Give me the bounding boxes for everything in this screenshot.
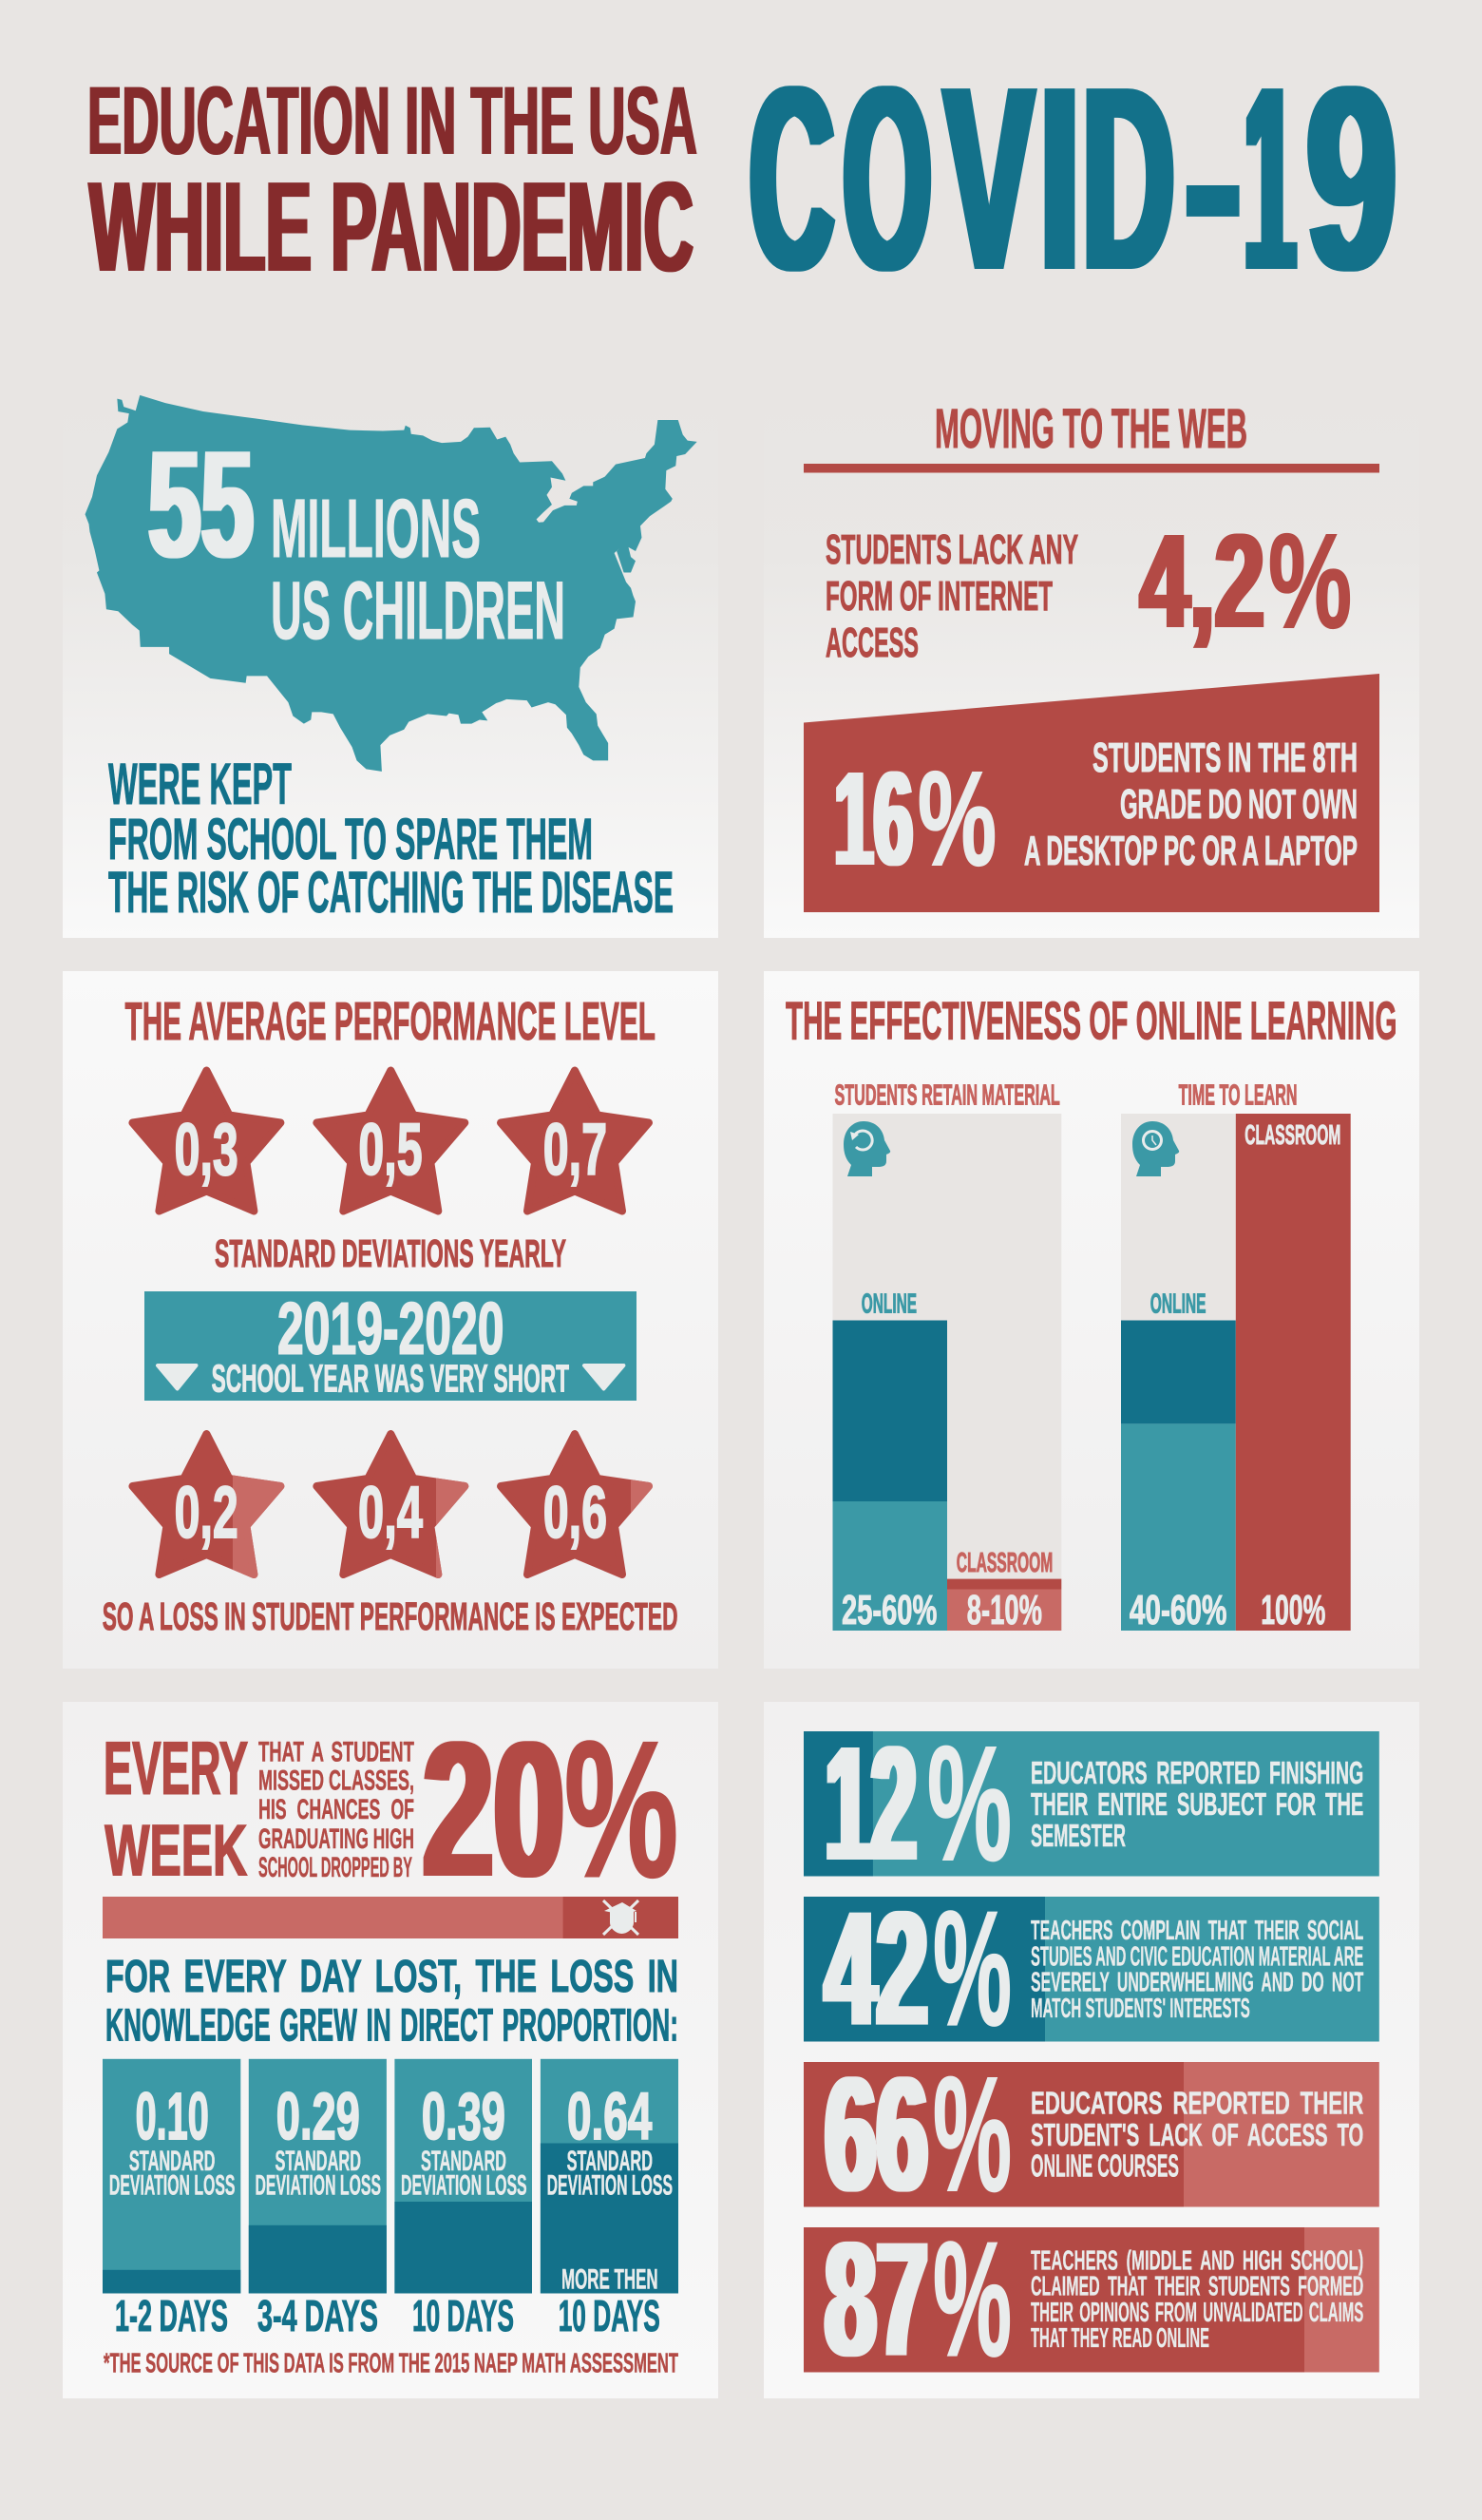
- panel: educator statistics: [764, 1702, 1419, 2398]
- subheading line 2: KNOWLEDGE GREW IN DIRECT PROPORTION:: [105, 2000, 678, 2051]
- label: US children: US CHILDREN: [271, 565, 565, 657]
- title: COVID-19: O: [844, 32, 931, 325]
- stat bar: 42%: %: [933, 1879, 1012, 2060]
- chart: students retain material: CLASSROOM: [957, 1548, 1053, 1578]
- column: 0.39, 10 days: 10 DAYS: [412, 2291, 514, 2340]
- stat bar: 12%: 12: [826, 1713, 917, 1895]
- star: 0,4: [316, 1434, 465, 1575]
- stat bar: 12%: SEMESTER: [1031, 1819, 1126, 1854]
- panel: effectiveness of online learning: [764, 971, 1419, 1669]
- column: 0.39, 10 days: STANDARD: [421, 2146, 506, 2177]
- column: 0.10, 1-2 days: [103, 2059, 240, 2340]
- title: COVID-19: 9: [1306, 32, 1396, 325]
- panel background: [764, 971, 1419, 1669]
- panel: moving to the web: [764, 394, 1419, 938]
- column: 0.39, 10 days: DEVIATION LOSS: [401, 2169, 527, 2201]
- star: 0,4: 0,4: [358, 1472, 423, 1554]
- heading rule: [804, 464, 1379, 473]
- stat bar: 42%: 42: [825, 1879, 928, 2060]
- icon: graduation cap with crossed lines: [603, 1900, 638, 1935]
- chart: students retain material: 8-10%: [967, 1588, 1042, 1633]
- panel: every week missed: [63, 1702, 718, 2398]
- stat bar: 66%: ONLINE COURSES: [1031, 2148, 1179, 2184]
- column: 0.39, 10 days: [394, 2059, 532, 2340]
- label: millions: MILLIONS: [271, 483, 481, 575]
- star: 0,2: 0,2: [175, 1472, 238, 1554]
- chart: students retain material: [832, 1079, 1061, 1633]
- star: 0,2: [132, 1434, 280, 1575]
- caption line 2: FROM SCHOOL TO SPARE THEM: [108, 807, 593, 871]
- panel: 55 million US children: [63, 394, 718, 938]
- panel background: [63, 971, 718, 1669]
- title line: education in the USA: EDUCATION IN THE USA: [87, 67, 697, 175]
- star: 0,3: 0,3: [175, 1109, 238, 1191]
- star: 0,6: [501, 1434, 649, 1575]
- banner: 2019-2020 school year: 2019-2020: [277, 1288, 504, 1369]
- column: 0.64, more then 10 days: [541, 2059, 678, 2340]
- title: COVID-19: V: [944, 32, 1035, 325]
- star: 0,6: 0,6: [543, 1472, 607, 1554]
- stat bar: 87%: %: [933, 2209, 1012, 2391]
- label: loss in student performance: SO A LOSS IN STUDENT PERFORMANCE IS EXPECTED: [103, 1594, 677, 1638]
- column: 0.64, more then 10 days: 10 DAYS: [559, 2291, 660, 2340]
- text: missed classes: HIS CHANCES OF: [258, 1794, 414, 1825]
- star: 0,5: 0,5: [358, 1109, 423, 1191]
- text: students lack internet: ACCESS: [826, 620, 919, 666]
- stat bar: 87%: 87: [825, 2209, 928, 2391]
- chart: students retain material: 25-60%: [842, 1588, 937, 1633]
- title: COVID-19: -: [1185, 32, 1242, 325]
- title: COVID-19: C: [750, 32, 834, 325]
- column: 0.10, 1-2 days: 0.10: [136, 2079, 209, 2153]
- column: 0.10, 1-2 days: 1-2 DAYS: [115, 2291, 228, 2340]
- stat: 16%: %: [918, 743, 997, 893]
- stat bar: 12%: [804, 1713, 1379, 1895]
- title: COVID-19: I: [1039, 32, 1079, 325]
- star: 0,3: [132, 1070, 280, 1211]
- column: 0.29, 3-4 days: STANDARD: [276, 2146, 361, 2177]
- chart: students retain material: ONLINE: [862, 1289, 917, 1319]
- red wedge: [804, 674, 1379, 912]
- stat: 16%: 16: [834, 743, 913, 893]
- panel background: [764, 1702, 1419, 2398]
- heading: THE AVERAGE PERFORMANCE LEVEL: [125, 992, 656, 1052]
- column: 0.39, 10 days: 0.39: [422, 2079, 505, 2153]
- text: missed classes: MISSED CLASSES,: [258, 1766, 414, 1797]
- text: missed classes: [258, 1737, 414, 1883]
- column: 0.29, 3-4 days: 0.29: [276, 2079, 360, 2153]
- subheading line 1: FOR EVERY DAY LOST, THE LOSS IN: [105, 1952, 678, 2002]
- progress bar with graduation icon: [103, 1897, 678, 1938]
- chart: time to learn: CLASSROOM: [1244, 1120, 1340, 1151]
- chart: time to learn: 40-60%: [1130, 1588, 1226, 1633]
- column: 0.64, more then 10 days: 0.64: [567, 2079, 652, 2153]
- stat: 4,2%: 4,2: [1140, 506, 1264, 656]
- text: students lack internet: [826, 527, 1078, 666]
- column: 0.10, 1-2 days: DEVIATION LOSS: [109, 2169, 236, 2201]
- star: 0,7: [501, 1070, 649, 1211]
- stat bar: 42%: MATCH STUDENTS' INTERESTS: [1031, 1994, 1250, 2024]
- label: standard deviations yearly: STANDARD DEVIATIONS YEARLY: [215, 1231, 566, 1275]
- chart: time to learn: 100%: [1261, 1588, 1325, 1633]
- stat bar: 87%: THAT THEY READ ONLINE: [1031, 2323, 1209, 2354]
- text: students without a computer: [1024, 735, 1358, 874]
- panel: every week missed: SCHOOL DROPPED BY: [258, 1852, 412, 1883]
- panel background: [63, 1702, 718, 2398]
- title: [87, 32, 1396, 325]
- column: 0.10, 1-2 days: STANDARD: [129, 2146, 215, 2177]
- text: students lack internet: FORM OF INTERNET: [826, 574, 1053, 620]
- star: 0,5: [316, 1070, 465, 1211]
- map of the USA: [86, 395, 697, 772]
- text: missed classes: THAT A STUDENT: [258, 1737, 414, 1768]
- text: missed classes: GRADUATING HIGH: [258, 1823, 414, 1855]
- stat bar: 12%: %: [927, 1713, 1012, 1895]
- icon: head with refresh arrow: [844, 1121, 890, 1176]
- label: every week: WEEK: [104, 1811, 247, 1891]
- panel background: [63, 394, 718, 938]
- column: 0.64, more then 10 days: MORE THEN: [561, 2264, 658, 2296]
- label: every week: [104, 1728, 248, 1891]
- column: 0.29, 3-4 days: 3-4 DAYS: [257, 2291, 378, 2340]
- label: every week: EVERY: [104, 1728, 248, 1810]
- title line: while pandemic: WHILE PANDEMIC: [89, 155, 694, 298]
- stat: 20%: %: [564, 1702, 678, 1918]
- caption line 3: THE RISK OF CATCHING THE DISEASE: [108, 860, 674, 925]
- column: 0.64, more then 10 days: STANDARD: [567, 2146, 653, 2177]
- panel background: [764, 394, 1419, 938]
- column: 0.64, more then 10 days: DEVIATION LOSS: [547, 2169, 673, 2201]
- stat bar: 87%: [804, 2209, 1379, 2391]
- column: 0.29, 3-4 days: [249, 2059, 387, 2340]
- column: 0.29, 3-4 days: DEVIATION LOSS: [255, 2169, 381, 2201]
- caption line 1: WERE KEPT: [108, 752, 292, 816]
- stat bar: 66%: [804, 2044, 1379, 2225]
- title: COVID-19: 1: [1244, 32, 1295, 325]
- chart: time to learn: ONLINE: [1150, 1289, 1206, 1319]
- text: students lack internet: STUDENTS LACK ANY: [826, 527, 1078, 573]
- panel: average performance level: [63, 971, 718, 1669]
- stat: 55: 55: [148, 419, 254, 590]
- banner: 2019-2020 school year: [144, 1288, 636, 1401]
- chart: time to learn: TIME TO LEARN: [1179, 1079, 1298, 1112]
- stat bar: 66%: %: [933, 2044, 1012, 2225]
- star: 0,7: 0,7: [543, 1109, 607, 1191]
- chart: time to learn: [1121, 1079, 1351, 1633]
- source footnote: *THE SOURCE OF THIS DATA IS FROM THE 2015 NAEP MATH ASSESSMENT: [104, 2347, 678, 2377]
- stat: 20%: 20: [423, 1702, 564, 1918]
- chart: students retain material: STUDENTS RETAIN MATERIAL: [834, 1079, 1060, 1112]
- stat bar: 66%: 66: [825, 2044, 928, 2225]
- stat: 4,2%: %: [1268, 506, 1352, 656]
- stat bar: 42%: [804, 1879, 1379, 2060]
- banner: 2019-2020 school year: SCHOOL YEAR WAS VERY SHORT: [212, 1357, 569, 1401]
- title: COVID-19: D: [1083, 32, 1174, 325]
- icon: head with clock: [1132, 1121, 1179, 1176]
